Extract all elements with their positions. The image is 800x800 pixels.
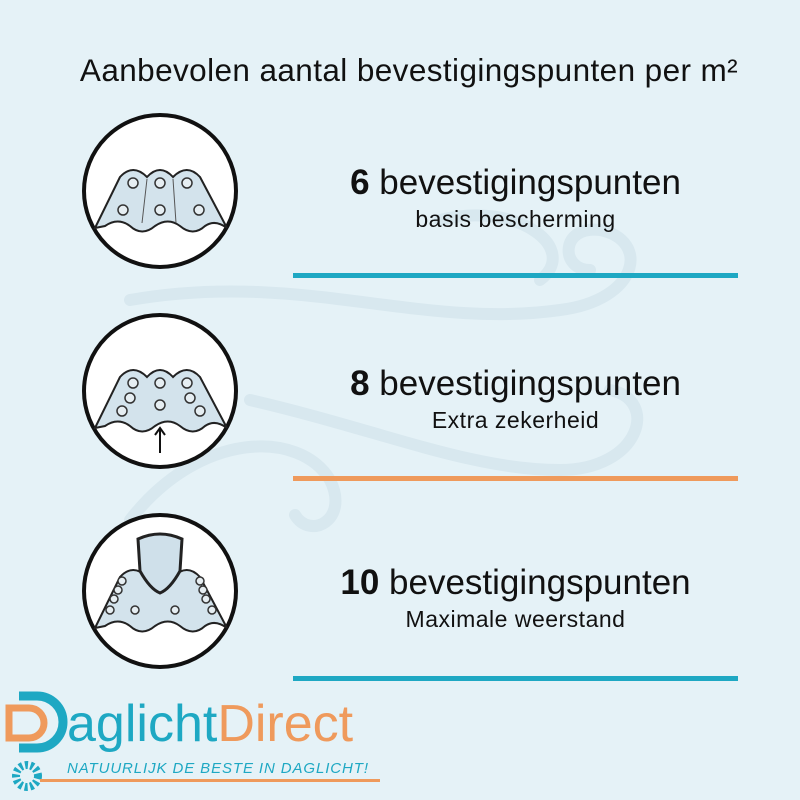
text: 6 points (350, 163, 681, 232)
text: 6 points: basis bescherming (415, 206, 616, 232)
logo: NATUURLIJK DE BESTE IN DAGLICHT! (67, 760, 369, 777)
text: 10 points (340, 563, 691, 632)
icon: sheet 10 points with shield (82, 513, 238, 669)
teal line 3 (293, 676, 738, 681)
text: 8 points (350, 364, 681, 433)
text: 6 points: 6 bevestigingspunten (350, 163, 681, 202)
orange line (293, 476, 738, 481)
logo: aglichtDirect (67, 695, 353, 753)
text: 8 points: Extra zekerheid (432, 407, 599, 433)
teal line 1 (293, 273, 738, 278)
text: 10 points: Maximale weerstand (406, 606, 625, 632)
title: Aanbevolen aantal bevestigingspunten per m² (80, 52, 738, 88)
logo (6, 692, 380, 791)
icon: sheet 8 points with arrow (82, 313, 238, 469)
text: 10 points: 10 bevestigingspunten (340, 563, 691, 602)
text: 8 points: 8 bevestigingspunten (350, 364, 681, 403)
icon: sheet 6 points (82, 113, 238, 269)
